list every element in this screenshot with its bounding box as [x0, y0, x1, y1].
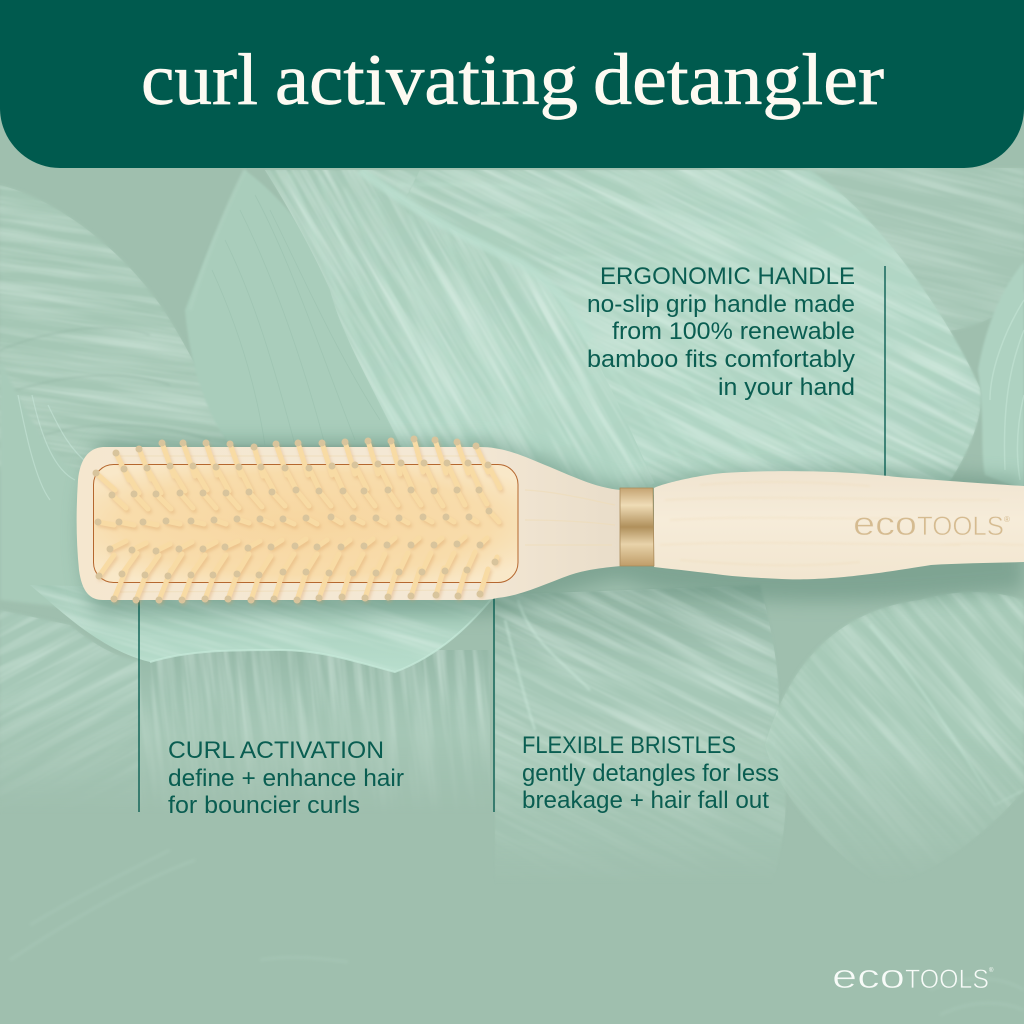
leaf: upper left — [0, 185, 232, 470]
bristle stems — [96, 439, 500, 600]
header banner — [0, 0, 1024, 168]
callout: curl activation: for bouncier curls — [168, 792, 360, 819]
logo: ecotools — [832, 958, 994, 996]
leaf: band under brush head — [30, 585, 495, 672]
callout: ergonomic handle — [587, 263, 855, 401]
handle logo: TOOLS — [917, 511, 1004, 541]
callout: curl activation: define + enhance hair — [168, 765, 404, 792]
title: detangler — [593, 39, 884, 120]
callout: ergonomic handle: no-slip grip handle made — [587, 291, 855, 318]
leaf: lower left — [0, 612, 140, 774]
leaf: far left lower — [0, 360, 95, 610]
head wood grain — [120, 456, 615, 592]
leaf: large veined leaf — [265, 170, 981, 495]
leaf: top right dim — [700, 168, 1024, 331]
title — [141, 39, 884, 120]
logo: ecotools: TOOLS — [905, 964, 989, 994]
logo: ecotools: ® — [989, 967, 994, 974]
background: leaf photo — [0, 168, 1024, 836]
leaf: right edge — [978, 262, 1024, 490]
leaf: bottom faint foliage — [10, 850, 1024, 1015]
handle logo: eco — [853, 505, 917, 542]
metal ring — [620, 488, 654, 566]
logo: ecotools: eco — [832, 958, 905, 996]
callout: ergonomic handle: bamboo fits comfortably — [587, 346, 855, 373]
handle logo: ® — [1004, 515, 1010, 524]
callout: flexible bristles: gently detangles for less — [522, 760, 779, 787]
bristle ball tips — [96, 439, 495, 600]
guide line: curl activation — [138, 598, 140, 812]
callout: flexible bristles: breakage + hair fall out — [522, 787, 769, 814]
callout: curl activation: CURL ACTIVATION — [168, 737, 384, 764]
leaf: lower centre — [495, 587, 785, 834]
guide line: ergonomic handle — [884, 266, 886, 476]
brush head and neck — [77, 447, 621, 600]
guide line: flexible bristles — [493, 598, 495, 812]
brush — [77, 439, 1024, 600]
callout: curl activation — [168, 737, 404, 819]
leaf: centre smooth — [185, 170, 405, 445]
callout: flexible bristles: FLEXIBLE BRISTLES — [522, 732, 736, 759]
cushion pad — [94, 464, 518, 582]
callout: ergonomic handle: from 100% renewable — [612, 318, 855, 345]
handle — [654, 471, 1024, 579]
leaf: draped under head — [140, 650, 490, 783]
callout: ergonomic handle: ERGONOMIC HANDLE — [600, 263, 855, 290]
bristles — [96, 439, 500, 600]
callout: flexible bristles — [522, 732, 779, 814]
callout: ergonomic handle: in your hand — [718, 374, 855, 401]
title: curl — [141, 39, 258, 120]
handle logo — [853, 505, 1010, 542]
brush shadow — [80, 440, 1024, 615]
title: activating — [275, 39, 578, 120]
leaf: lower right — [770, 592, 1024, 836]
